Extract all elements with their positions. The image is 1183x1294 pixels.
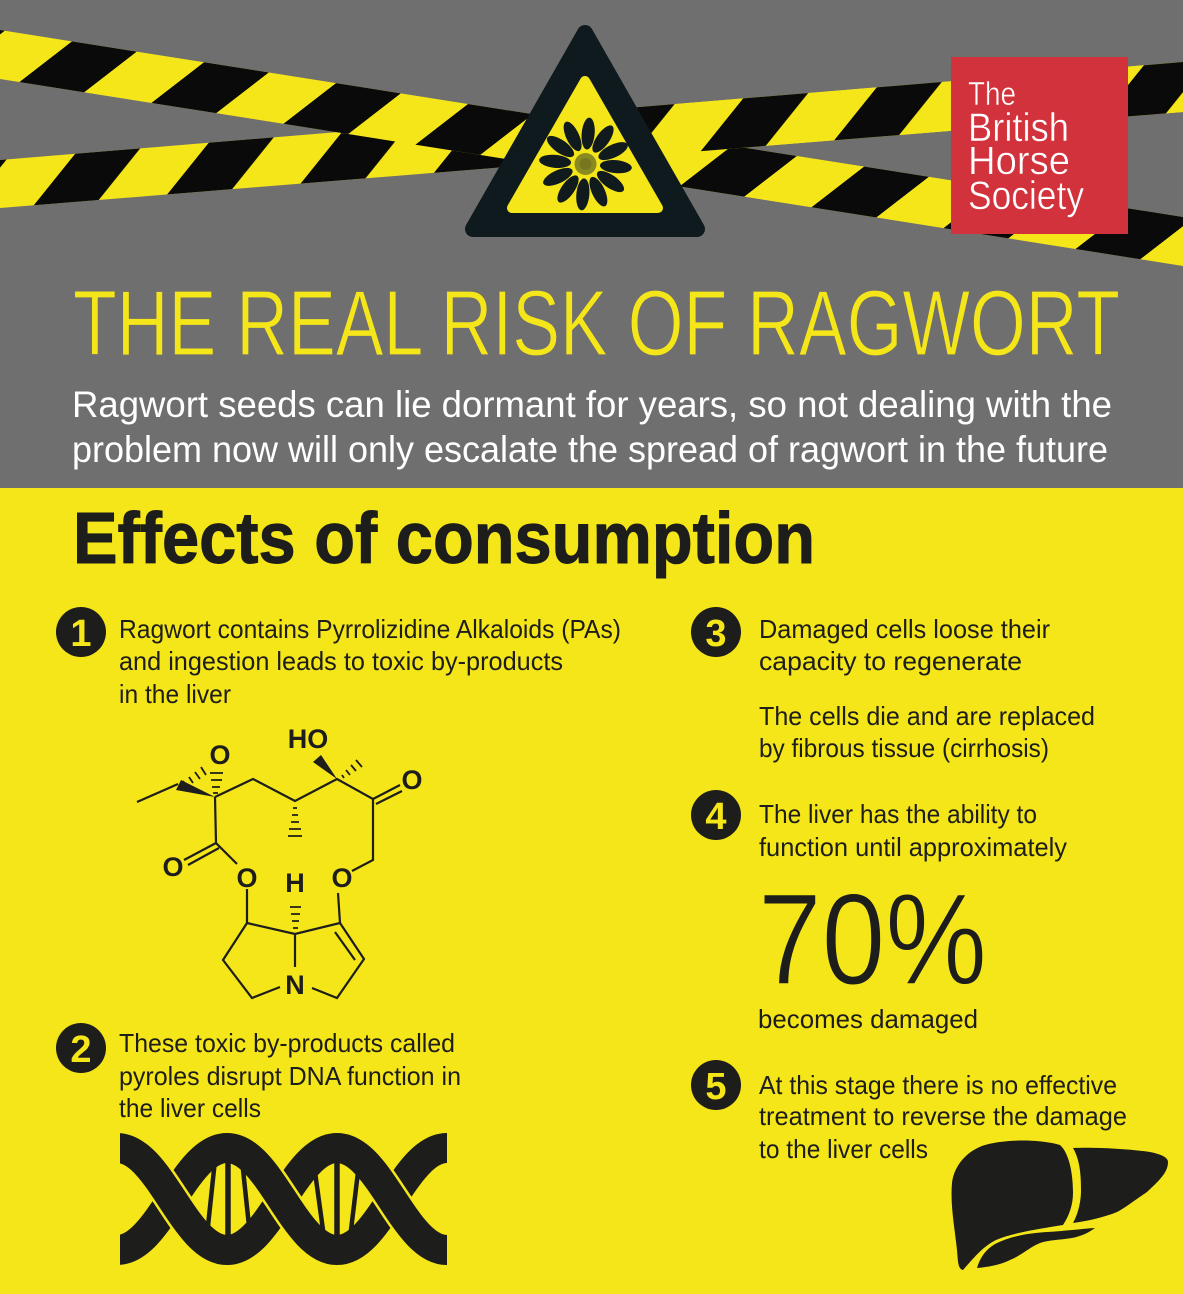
step 2 text: the liver cells	[119, 1093, 261, 1123]
chart: pyrrolizidine alkaloid molecule: O	[209, 740, 231, 770]
step 4 caption: becomes damaged	[758, 1004, 978, 1034]
logo: The British Horse Society: Horse	[968, 139, 1070, 183]
number badge 3: 3	[705, 613, 727, 655]
logo: The British Horse Society: The	[968, 75, 1016, 112]
chart: pyrrolizidine alkaloid molecule	[137, 724, 423, 1000]
logo: The British Horse Society: British	[968, 106, 1069, 150]
chart: pyrrolizidine alkaloid molecule: H	[285, 868, 305, 898]
step 3 text: Damaged cells loose their	[759, 614, 1050, 644]
step 1 text: Ragwort contains Pyrrolizidine Alkaloids (PAs)	[119, 614, 621, 644]
chart: pyrrolizidine alkaloid molecule: O	[331, 863, 353, 893]
chart: pyrrolizidine alkaloid molecule: N	[285, 970, 305, 1000]
icon: warning triangle with ragwort flower	[473, 33, 697, 229]
statistic: 70%: 70%	[758, 866, 987, 1012]
step 1 text	[119, 614, 621, 709]
logo: The British Horse Society	[951, 57, 1128, 234]
step 4 text	[759, 799, 1067, 862]
step 5 text: treatment to reverse the damage	[759, 1101, 1127, 1131]
hazard tape: falling strip	[0, 30, 1183, 266]
step 5 text	[759, 1070, 1127, 1164]
icon: DNA double helix	[117, 1148, 447, 1250]
intro text	[72, 384, 1112, 470]
step 4 text: function until approximately	[759, 832, 1067, 862]
logo: The British Horse Society: Society	[968, 174, 1084, 218]
chart: pyrrolizidine alkaloid molecule: HO	[288, 724, 328, 754]
step 5 text: At this stage there is no effective	[759, 1070, 1117, 1100]
step 2 text	[119, 1028, 461, 1123]
number badge 5	[691, 1060, 741, 1110]
chart: pyrrolizidine alkaloid molecule: O	[162, 852, 184, 882]
number badge 1	[56, 607, 106, 657]
step 5 text: to the liver cells	[759, 1134, 928, 1164]
heading: effects of consumption: Effects of consumption	[73, 499, 815, 579]
number badge 2: 2	[70, 1029, 92, 1071]
number badge 1: 1	[70, 613, 92, 655]
step 2 text: These toxic by-products called	[119, 1028, 455, 1058]
step 1 text: in the liver	[119, 679, 231, 709]
icon: liver	[952, 1140, 1168, 1270]
hazard tape: rising strip	[0, 62, 1183, 208]
number badge 2	[56, 1023, 106, 1073]
step 3 text: by fibrous tissue (cirrhosis)	[759, 733, 1049, 763]
number badge 5: 5	[705, 1066, 727, 1108]
step 3 text: The cells die and are replaced	[759, 701, 1095, 731]
step 2 text: pyroles disrupt DNA function in	[119, 1061, 461, 1091]
chart: pyrrolizidine alkaloid molecule: O	[401, 765, 423, 795]
step 3 text: capacity to regenerate	[759, 646, 1022, 676]
number badge 4	[691, 790, 741, 840]
panel: grey header background	[0, 0, 1183, 488]
chart: pyrrolizidine alkaloid molecule: O	[236, 863, 258, 893]
step 1 text: and ingestion leads to toxic by-products	[119, 646, 563, 676]
step 4 text: The liver has the ability to	[759, 799, 1037, 829]
step 3 text	[759, 614, 1095, 763]
hazard tape: rising strip overlap on right	[636, 62, 1182, 152]
intro text: problem now will only escalate the spread of ragwort in the future	[72, 429, 1108, 470]
number badge 4: 4	[705, 796, 727, 838]
panel: yellow effects background	[0, 488, 1183, 1294]
number badge 3	[691, 607, 741, 657]
intro text: Ragwort seeds can lie dormant for years, so not dealing with the	[72, 384, 1112, 425]
